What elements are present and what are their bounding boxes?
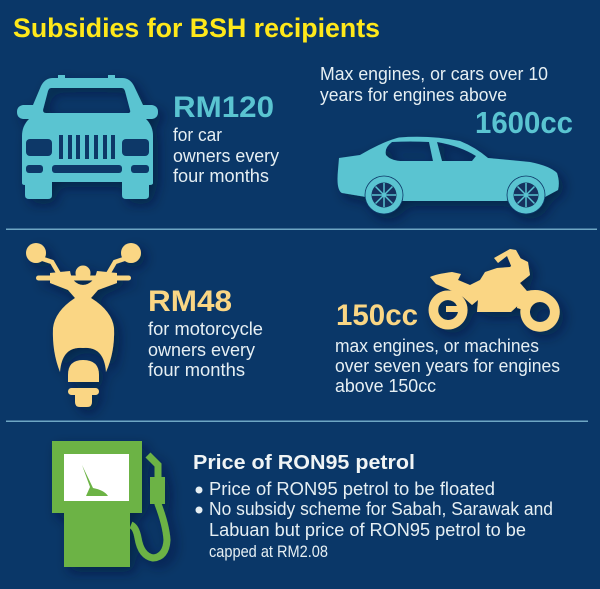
motorcycle engine text: above 150cc	[335, 376, 436, 396]
divider	[6, 420, 588, 422]
car engine text	[320, 64, 548, 105]
motorcycle subsidy text: for motorcycle	[148, 319, 263, 339]
car subsidy text: for car	[173, 125, 222, 145]
petrol bullet list	[196, 479, 553, 561]
motorcycle subsidy text: owners every	[148, 340, 255, 360]
car engine text: Max engines, or cars over 10	[320, 64, 548, 84]
icon: motorcycle	[429, 249, 560, 332]
car engine text: years for engines above	[320, 85, 507, 105]
RM120 amount: RM120	[173, 91, 274, 124]
1600cc figure: 1600cc	[475, 105, 573, 140]
150cc figure: 150cc	[336, 299, 418, 332]
car subsidy text: four months	[173, 166, 269, 186]
petrol bullet list: Labuan but price of RON95 petrol to be	[209, 520, 526, 540]
petrol bullet list: capped at RM2.08	[209, 542, 328, 561]
motorcycle engine text	[335, 336, 560, 396]
motorcycle subsidy text	[148, 319, 263, 380]
motorcycle subsidy text: four months	[148, 360, 245, 380]
petrol bullet list: No subsidy scheme for Sabah, Sarawak and	[209, 499, 553, 519]
motorcycle engine text: max engines, or machines	[335, 336, 539, 356]
RM48 amount: RM48	[148, 285, 232, 318]
petrol bullet list: Price of RON95 petrol to be floated	[209, 479, 495, 499]
motorcycle engine text: over seven years for engines	[335, 356, 560, 376]
icon: scooter	[26, 243, 141, 407]
icon: front view car	[17, 75, 158, 199]
car subsidy text: owners every	[173, 146, 279, 166]
title: Subsidies for BSH recipients	[13, 13, 380, 43]
divider	[6, 228, 597, 230]
icon: sedan	[338, 137, 559, 214]
car subsidy text	[173, 125, 279, 186]
icon: petrol pump	[52, 441, 167, 567]
petrol heading: Price of RON95 petrol	[193, 452, 415, 474]
